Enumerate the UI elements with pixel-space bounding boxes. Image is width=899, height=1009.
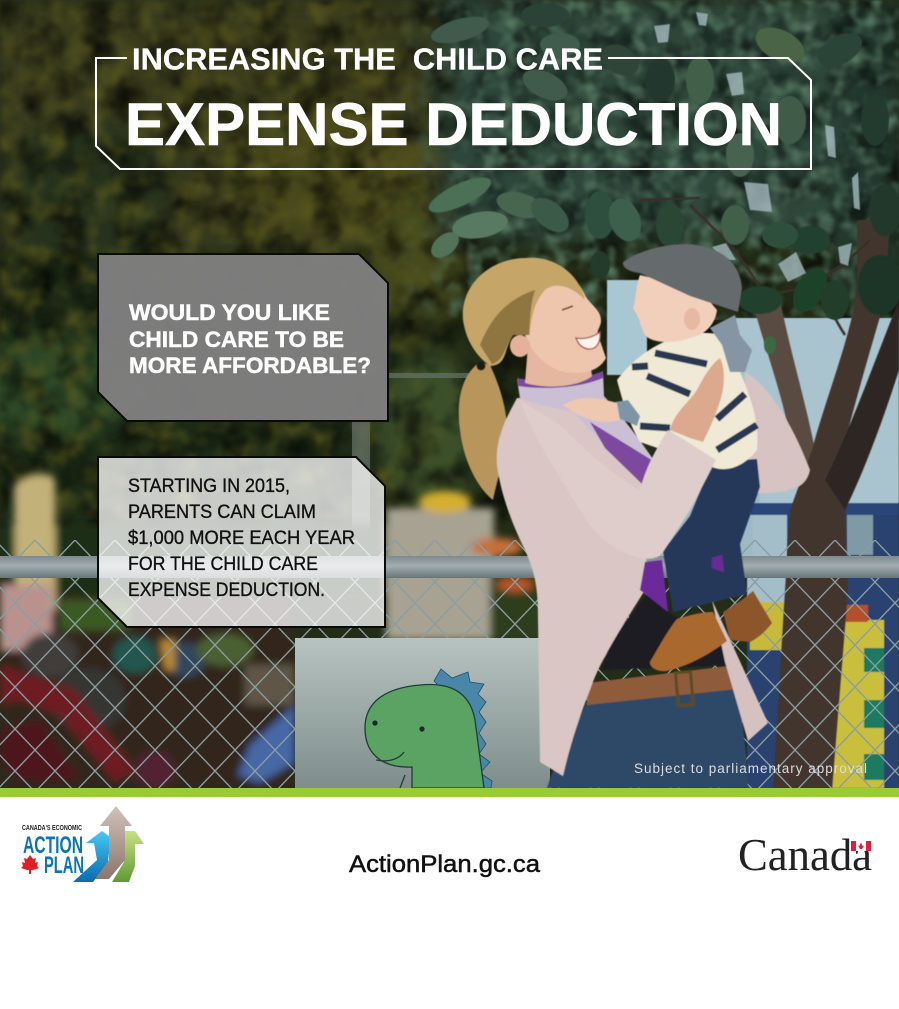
logo: Canada wordmark: Canada <box>738 829 872 880</box>
icon: maple leaf <box>21 855 39 874</box>
mother's neck <box>525 345 592 387</box>
icon: blue arrow <box>73 831 118 882</box>
pale building wall <box>607 280 899 790</box>
mother's face <box>525 273 606 373</box>
photo: mother and baby <box>459 244 810 788</box>
title frame <box>96 58 811 169</box>
purple feathers <box>640 560 668 612</box>
callout: answer: FOR THE CHILD CARE <box>128 554 318 575</box>
baby sweater <box>617 333 758 469</box>
cardigan body <box>497 398 650 776</box>
ponytail <box>459 362 507 500</box>
jeans <box>547 688 748 788</box>
mother's hair <box>463 258 585 366</box>
photo background <box>0 0 899 790</box>
mother's far sleeve <box>745 372 810 493</box>
callout: answer: $1,000 MORE EACH YEAR <box>128 528 355 549</box>
mother's smile <box>576 332 600 349</box>
baby ear <box>684 308 700 330</box>
near sleeve <box>520 400 716 559</box>
mother's closed eye <box>562 306 573 310</box>
callout: question: MORE AFFORDABLE? <box>129 353 371 378</box>
mother's hand <box>670 358 724 442</box>
belt buckle <box>675 671 693 706</box>
tree trunk and branches <box>640 198 899 790</box>
baby face <box>633 275 717 342</box>
icon: flag <box>851 841 871 851</box>
callout: answer: STARTING IN 2015, <box>128 476 290 497</box>
icon: green arrow <box>112 831 144 882</box>
sign with cartoon dinosaur <box>295 638 550 789</box>
callout: question: WOULD YOU LIKE <box>129 300 330 325</box>
baby pants <box>663 459 760 612</box>
sweater stripes <box>632 353 757 450</box>
faint posts behind boxes <box>352 373 478 555</box>
belt <box>587 665 737 705</box>
website address: ActionPlan.gc.ca <box>349 851 541 878</box>
leaves and sky gaps, right tree <box>425 3 899 354</box>
title line one: INCREASING THE CHILD CARE <box>132 42 603 76</box>
fence top rail <box>0 556 899 578</box>
logo: Canada's Economic Action Plan: CANADA'S ECONOMIC <box>22 825 82 832</box>
callout: question <box>98 254 388 421</box>
callout: answer <box>98 457 385 627</box>
chain link fence <box>0 540 899 790</box>
scarf <box>517 372 655 485</box>
logo: Canada's Economic Action Plan: ACTION <box>23 832 83 859</box>
note: parliamentary approval: Subject to parliamentary approval <box>634 761 867 776</box>
blurred foliage background <box>0 0 899 530</box>
logo: Canada's Economic Action Plan <box>21 806 144 882</box>
mother's ear <box>510 335 530 357</box>
callout: question: CHILD CARE TO BE <box>129 327 344 352</box>
baby cap <box>623 244 742 312</box>
cardigan right flap <box>712 600 768 741</box>
baby shoes <box>723 591 772 642</box>
footer panel <box>0 797 899 1009</box>
callout: answer: EXPENSE DEDUCTION. <box>128 580 325 601</box>
baby hand <box>563 398 620 422</box>
callout: answer: PARENTS CAN CLAIM <box>128 502 316 523</box>
foliage texture <box>0 0 899 530</box>
icon: tan arrow <box>95 806 132 879</box>
icon: dinosaur <box>365 669 492 788</box>
black top <box>600 590 735 670</box>
baby shirt cuff <box>615 400 640 426</box>
logo: Canada's Economic Action Plan: PLAN <box>44 852 84 879</box>
green band <box>0 788 899 797</box>
baby neck scarf <box>710 315 752 372</box>
title line two: EXPENSE DEDUCTION <box>125 91 782 158</box>
blurred playground items <box>0 474 546 790</box>
hair tie <box>476 362 486 370</box>
